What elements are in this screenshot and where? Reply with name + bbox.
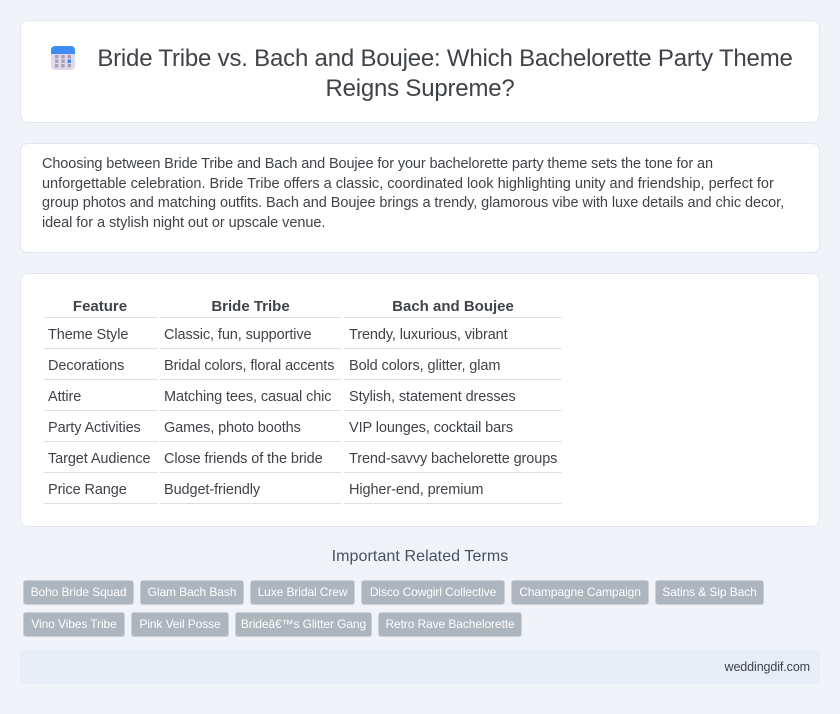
title: Bride Tribe vs. Bach and Boujee: Which Bachelorette Party Theme [97, 45, 793, 72]
intro paragraph: unforgettable celebration. Bride Tribe offers a classic, coordinated look highlighting unity and friendship, perfect for [42, 176, 774, 192]
comparison table: Budget-friendly [164, 482, 260, 498]
comparison table: Theme Style [48, 327, 128, 343]
related term tags: Champagne Campaign [519, 585, 641, 599]
footer bar [20, 650, 820, 684]
intro paragraph: ideal for a stylish night out or upscale venue. [42, 214, 325, 230]
comparison table: Higher-end, premium [349, 482, 483, 498]
related term tags: Vino Vibes Tribe [31, 617, 117, 631]
comparison table: Bride Tribe [211, 298, 290, 315]
comparison table: Classic, fun, supportive [164, 327, 312, 343]
intro paragraph: group photos and matching outfits. Bach and Boujee brings a trendy, glamorous vibe with luxe details and chic decor, [42, 195, 784, 211]
footer brand: weddingdif.com [725, 660, 810, 674]
comparison table: Trendy, luxurious, vibrant [349, 327, 508, 343]
comparison table: Matching tees, casual chic [164, 389, 331, 405]
comparison table: Stylish, statement dresses [349, 389, 516, 405]
comparison table: Attire [48, 389, 81, 405]
intro text panel [20, 143, 820, 253]
title: Reigns Supreme? [325, 75, 515, 102]
related term tags: Boho Bride Squad [31, 585, 126, 599]
related term tags [23, 580, 764, 637]
intro paragraph: Choosing between Bride Tribe and Bach and Boujee for your bachelorette party theme sets the tone for an [42, 156, 713, 172]
related term tags: Disco Cowgirl Collective [370, 585, 496, 599]
related term tags: Pink Veil Posse [139, 617, 221, 631]
comparison table panel [20, 273, 820, 527]
related term tags: Glam Bach Bash [148, 585, 236, 599]
comparison table: Games, photo booths [164, 420, 301, 436]
comparison table: VIP lounges, cocktail bars [349, 420, 513, 436]
comparison table: Party Activities [48, 420, 141, 436]
comparison table [44, 298, 562, 504]
comparison table: Feature [73, 298, 127, 315]
comparison table: Bold colors, glitter, glam [349, 358, 500, 374]
comparison table: Decorations [48, 358, 124, 374]
comparison table: Trend-savvy bachelorette groups [349, 451, 557, 467]
related term tags: Retro Rave Bachelorette [385, 617, 515, 631]
intro paragraph [42, 156, 784, 230]
comparison table: Bridal colors, floral accents [164, 358, 334, 374]
related term tags: Luxe Bridal Crew [258, 585, 347, 599]
icon: calendar [51, 46, 75, 70]
title [97, 45, 793, 102]
comparison table: Target Audience [48, 451, 150, 467]
related term tags: Satins & Sip Bach [662, 585, 757, 599]
comparison table: Price Range [48, 482, 127, 498]
header panel [20, 20, 820, 123]
related term tags: Brideâ€™s Glitter Gang [241, 617, 366, 631]
comparison table: Close friends of the bride [164, 451, 323, 467]
related terms heading: Important Related Terms [332, 548, 508, 565]
comparison table: Bach and Boujee [392, 298, 514, 315]
